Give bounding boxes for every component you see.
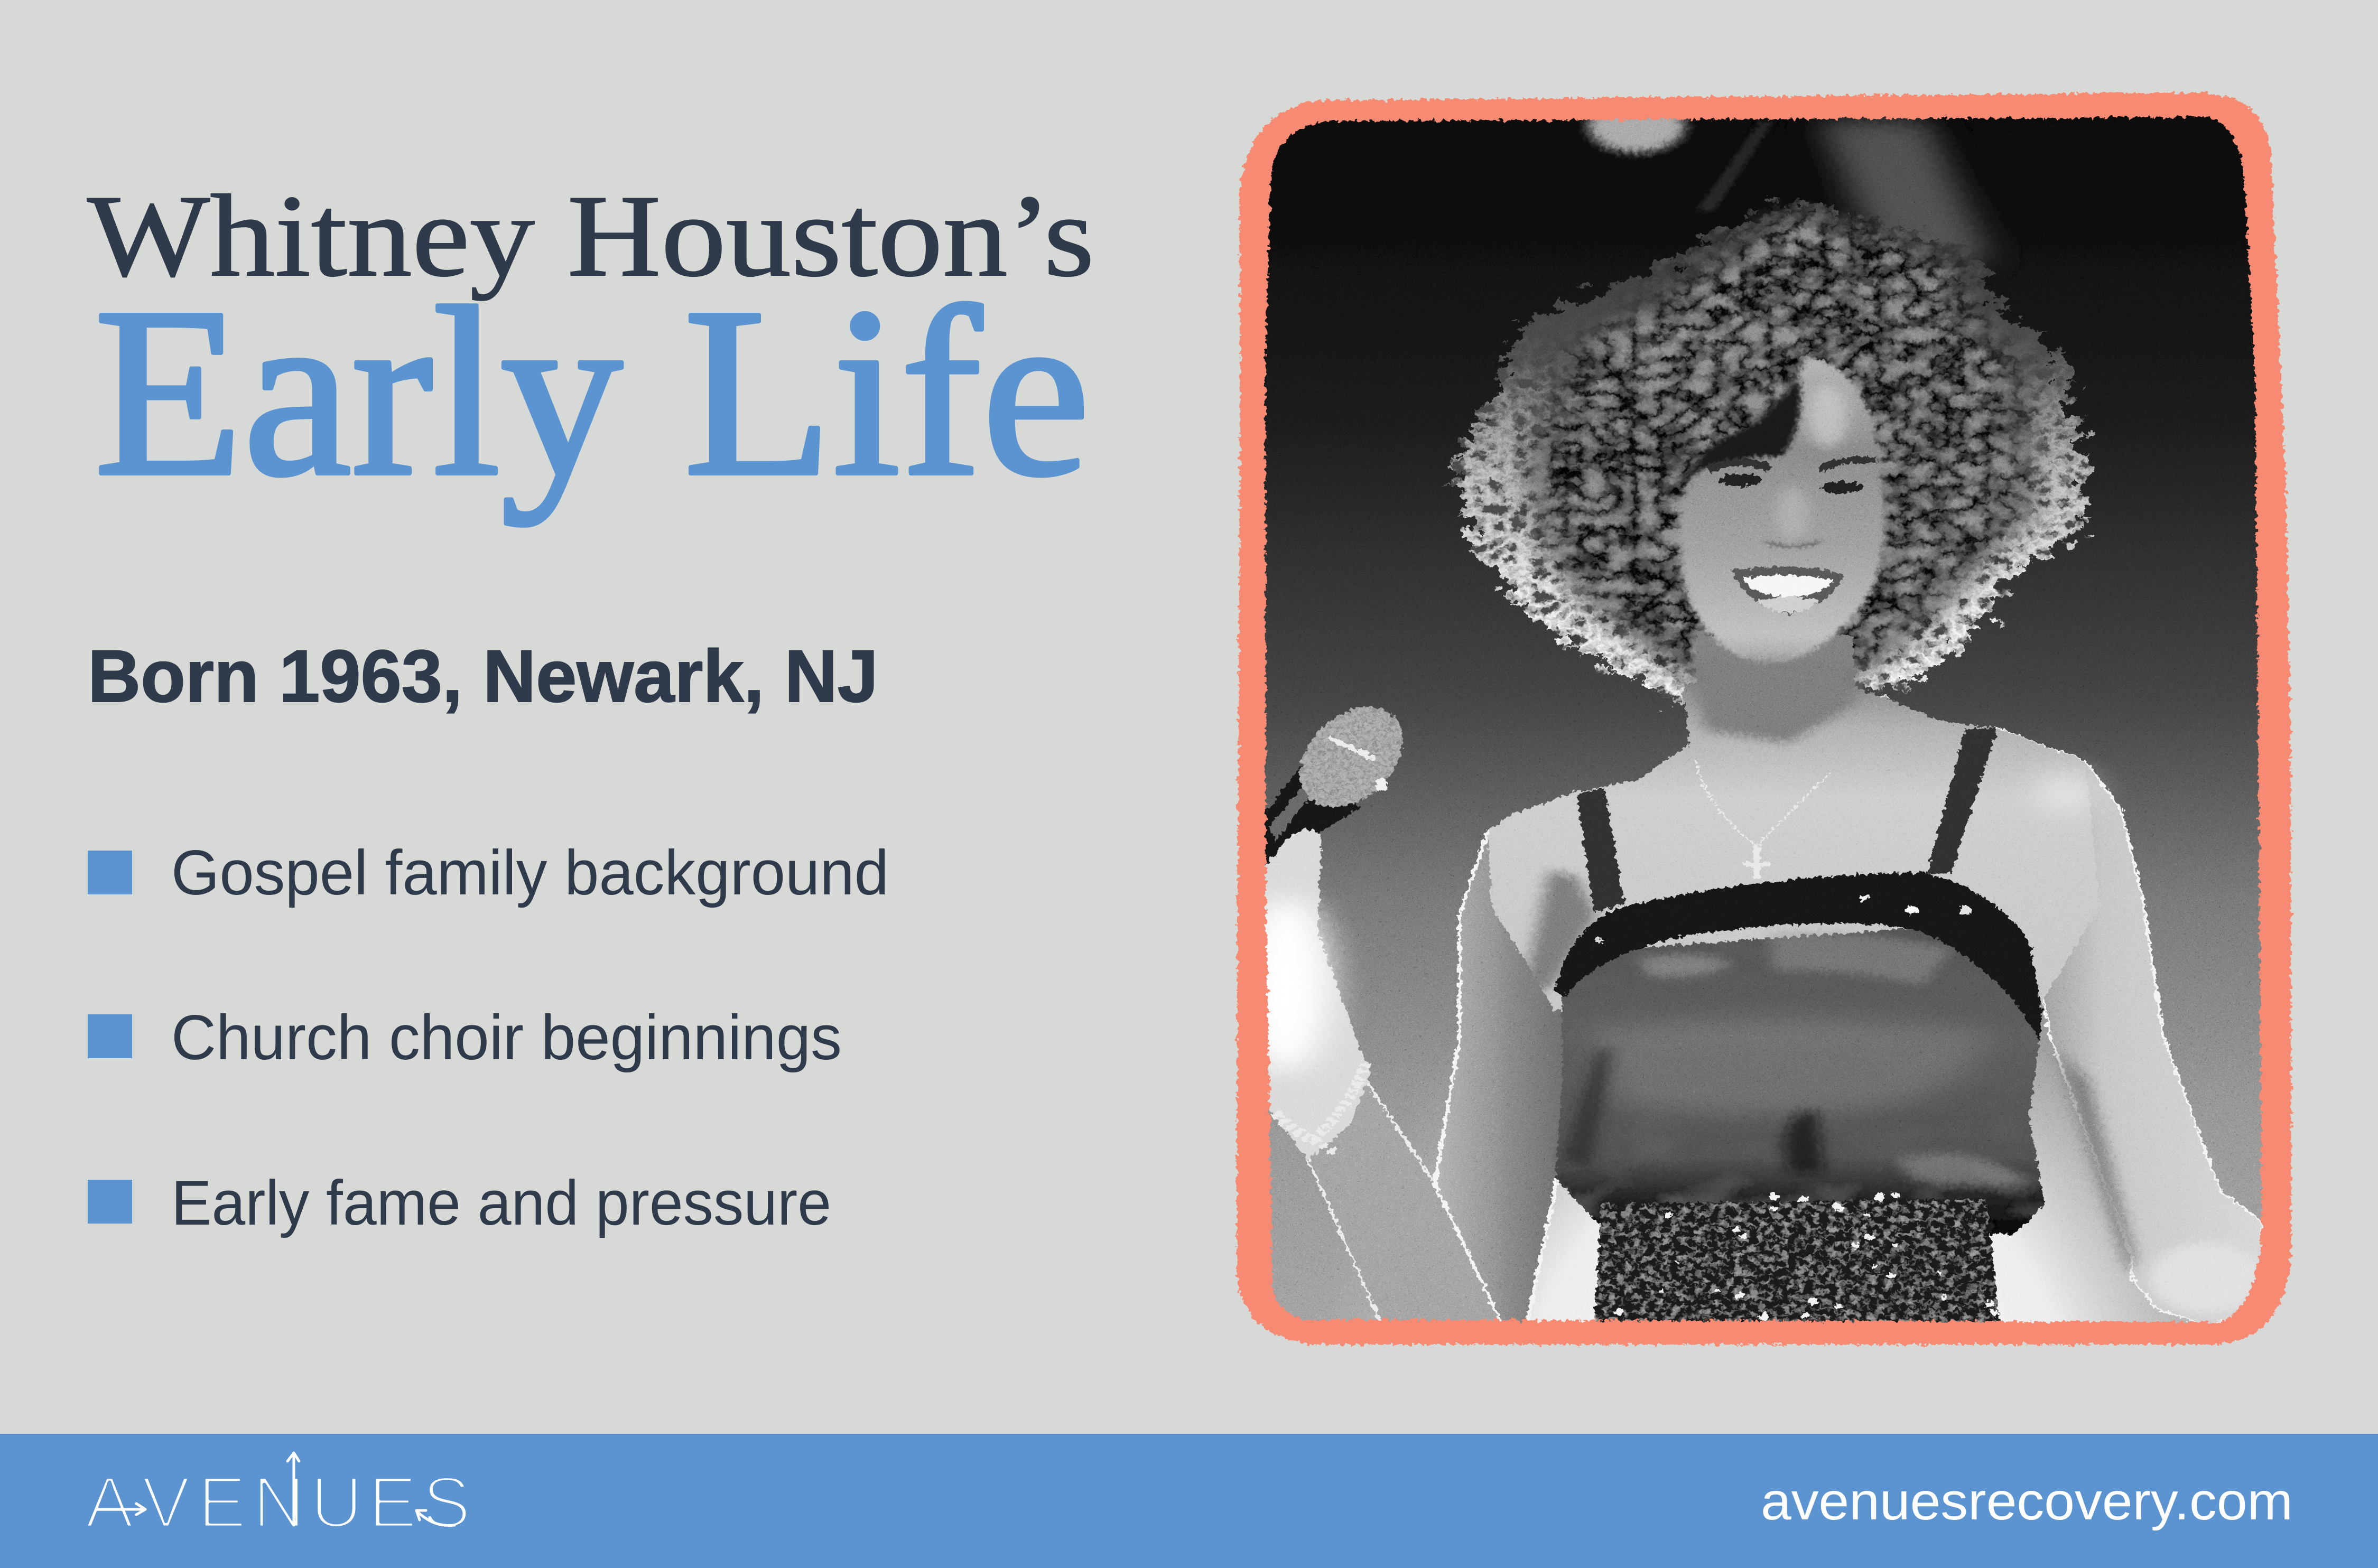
arm right (1994, 729, 2266, 1326)
title (87, 171, 1094, 526)
bullet icon 2 (88, 1014, 132, 1058)
photo backdrop (1258, 111, 2272, 1331)
hand (1258, 829, 1371, 1160)
satin folds (1562, 931, 2029, 1186)
bullet text 1: Gospel family background (171, 837, 889, 908)
fringe curls (1683, 377, 1801, 482)
bullet list (88, 837, 889, 1238)
hair rim light (1453, 200, 2086, 730)
straps (1576, 729, 1998, 912)
arm shadows (1520, 770, 2263, 1313)
necklace (1697, 761, 1831, 880)
footer bar (0, 1434, 2378, 1568)
sequin neckline band (1555, 873, 2042, 1041)
upper arm left (1435, 818, 1583, 1324)
hair mass (1527, 213, 2033, 686)
title line: Whitney Houston's: Whitney Houston’s (87, 171, 1094, 301)
neck shadow (1697, 666, 1852, 741)
bullet icon 3 (88, 1180, 132, 1224)
microphone (1258, 699, 1422, 880)
mouth (1732, 566, 1844, 614)
head and hair (1453, 98, 2086, 741)
stage lights (1589, 98, 1990, 263)
neck (1697, 636, 1856, 741)
forearm (1307, 1072, 1506, 1324)
title line: Early Life: Early Life (94, 258, 1090, 526)
face (1679, 357, 1884, 666)
neck blend (1689, 660, 1856, 744)
eyes and brows (1707, 456, 1877, 493)
website url: avenuesrecovery.com (1761, 1472, 2293, 1531)
hand highlight (1244, 897, 1329, 1072)
logo: Avenues (85, 1453, 471, 1543)
bracelet (1276, 1063, 1366, 1153)
forehead highlight (1808, 386, 1847, 447)
sequin waistband (1594, 1192, 2000, 1324)
film grain (1258, 111, 2272, 1331)
portrait photo (1244, 98, 2272, 1331)
photo frame: coral rough border (1237, 92, 2291, 1345)
logo wordmark: AVENUES (85, 1462, 471, 1543)
bullet icon 1 (88, 851, 132, 894)
logo arrows (97, 1453, 454, 1526)
satin top (1555, 928, 2045, 1234)
bullet text 2: Church choir beginnings (171, 1002, 842, 1073)
subheading: Born 1963, Newark, NJ (88, 634, 878, 717)
nose (1760, 487, 1824, 547)
bullet text 3: Early fame and pressure (171, 1168, 831, 1238)
chest (1488, 683, 2100, 1011)
body and outfit (1244, 660, 2266, 1326)
